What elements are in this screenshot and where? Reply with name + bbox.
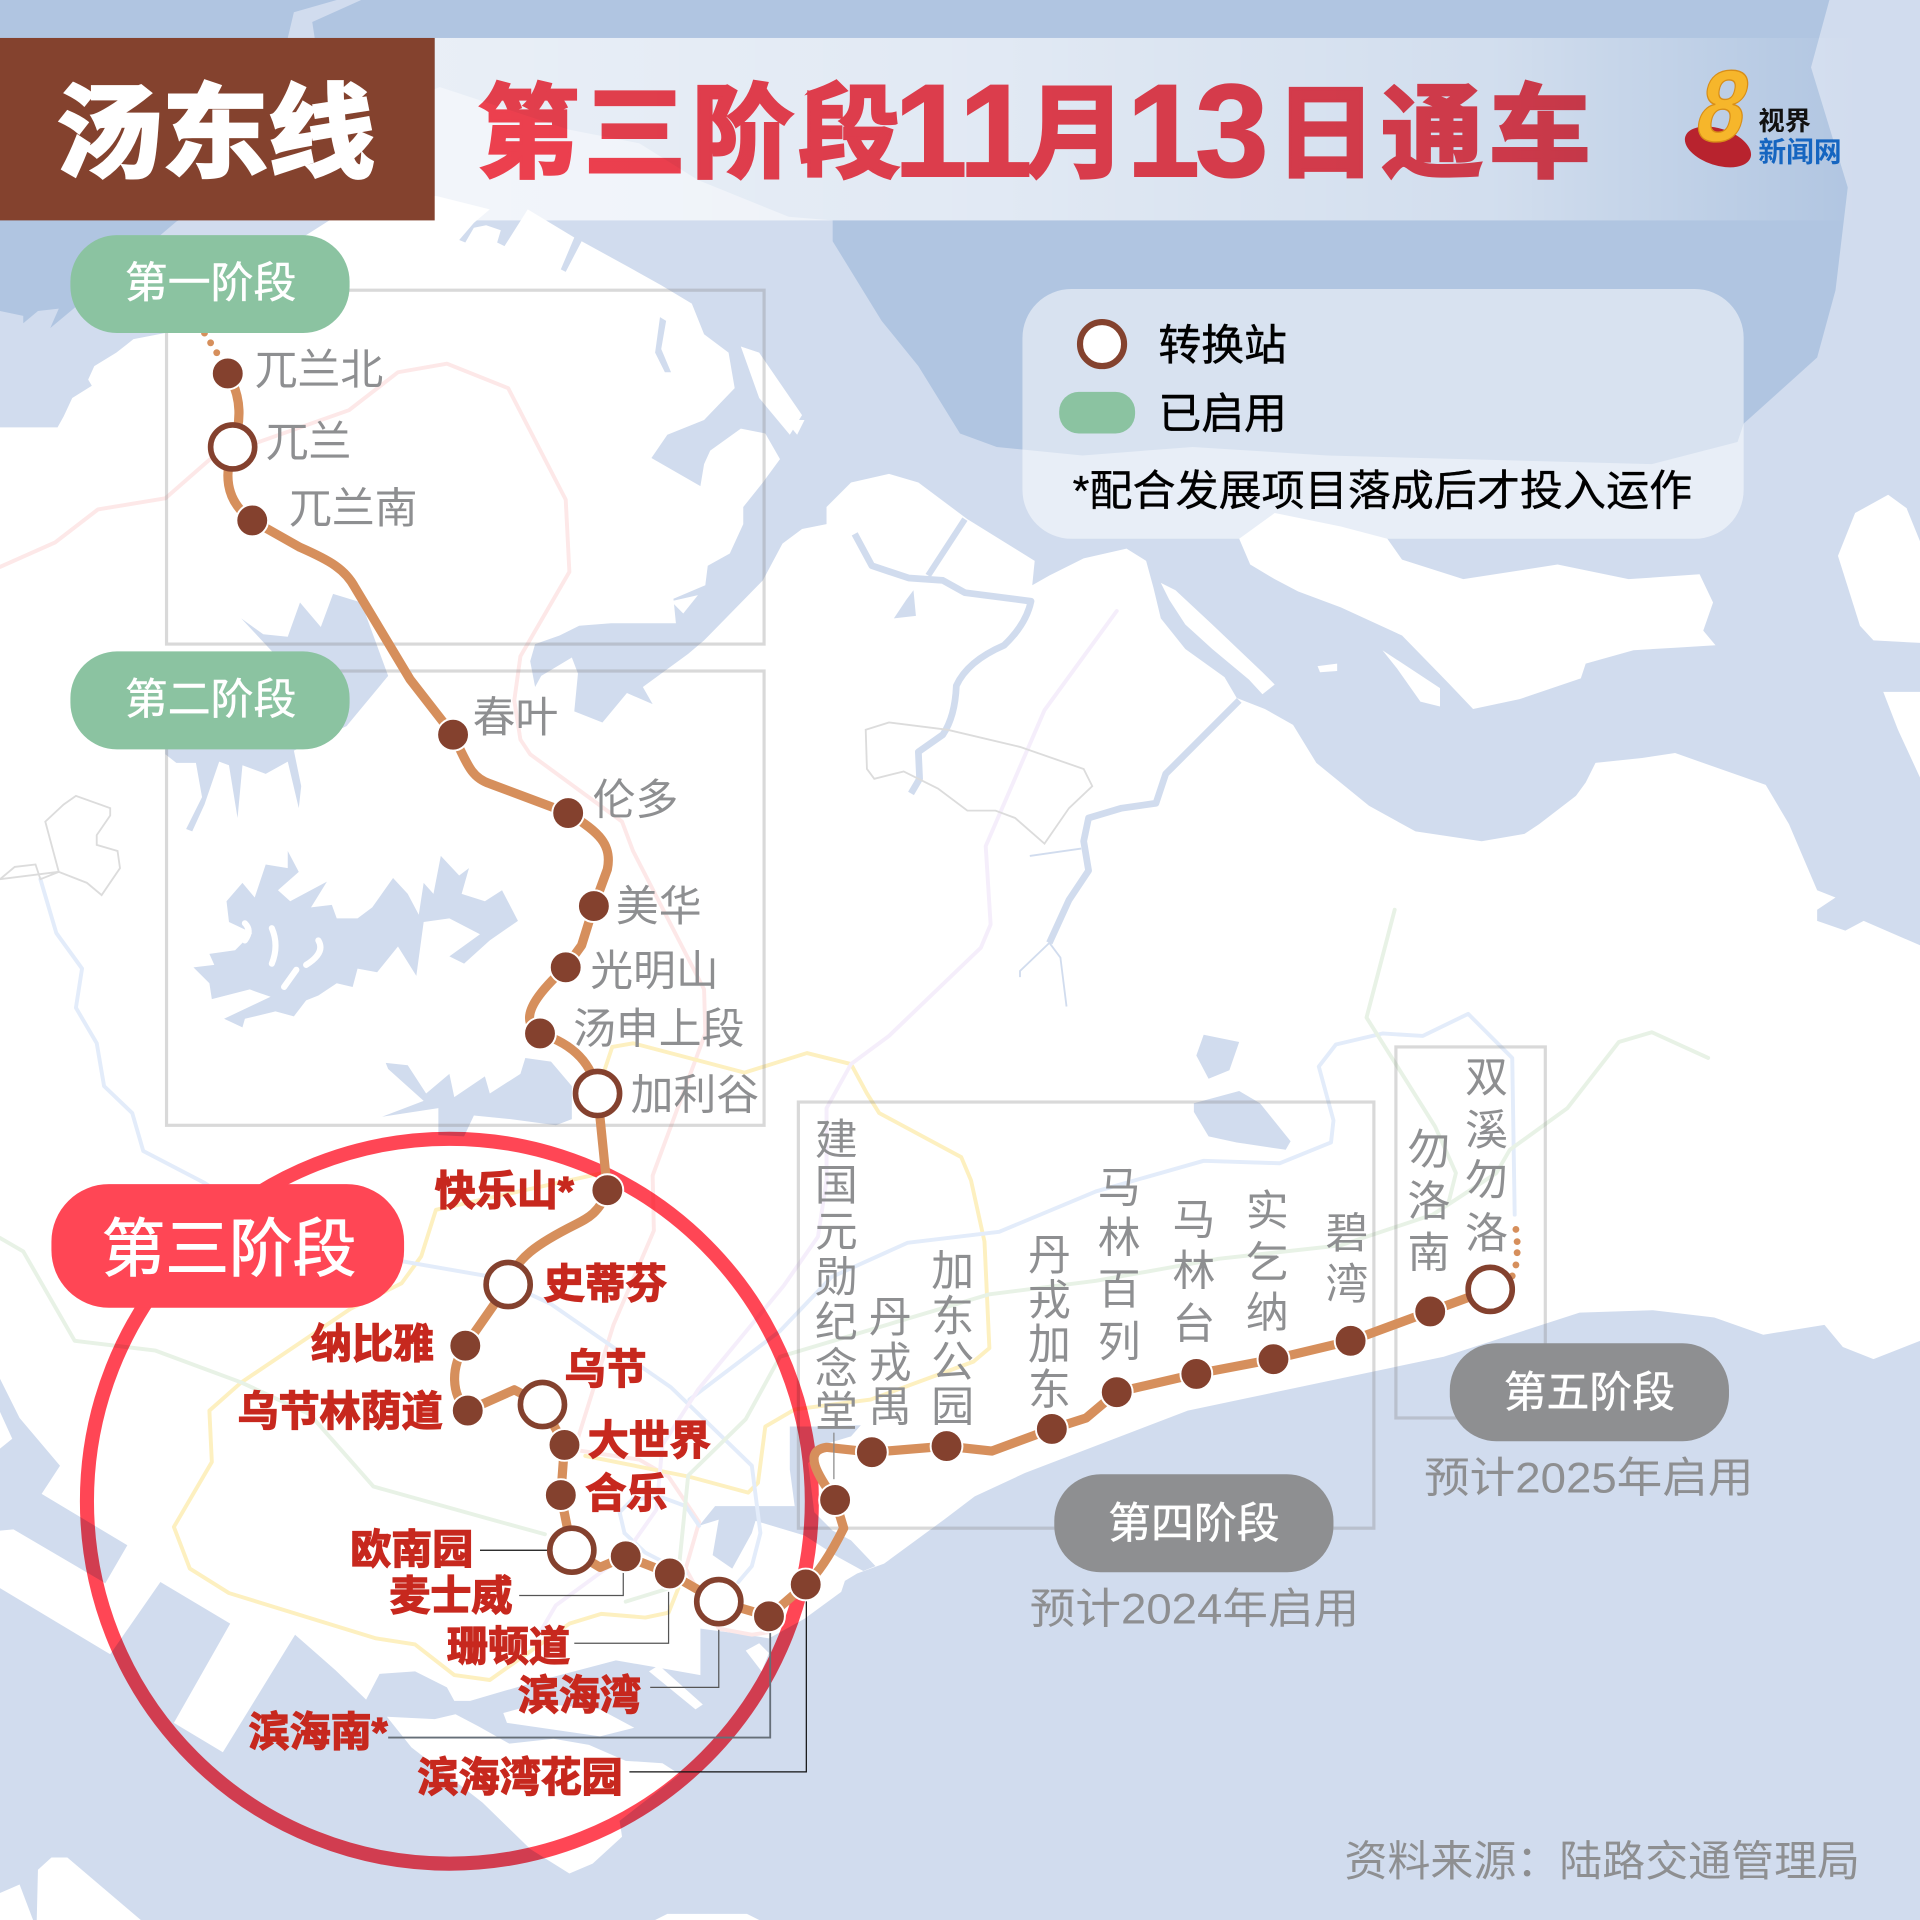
interchange stations	[211, 425, 1512, 1624]
phase three pill: 第三阶段	[102, 1214, 356, 1285]
title: phase three opening date: 11	[894, 57, 1032, 205]
station labels: phase three: 滨海湾花园	[418, 1754, 623, 1800]
phase two pill: 第二阶段	[125, 676, 296, 724]
phase three ring	[87, 1139, 812, 1864]
station labels: phases four and five (vertical): 加东公园	[931, 1248, 974, 1432]
legend: interchange ring	[1080, 322, 1124, 366]
station labels: phases four and five (vertical): 双溪勿洛	[1465, 1054, 1508, 1258]
phase two pill	[70, 651, 350, 749]
station labels: phase three: 珊顿道	[447, 1623, 570, 1669]
station labels: phases four and five (vertical): 马林百列	[1098, 1164, 1141, 1367]
logo: 8 视界新闻网: 视界	[1758, 106, 1811, 136]
header band	[435, 38, 1920, 220]
legend: opened swatch	[1059, 392, 1135, 433]
logo: 8 视界新闻网: 新闻网	[1758, 137, 1842, 168]
Thomson-East Coast Line route	[201, 330, 1521, 1616]
phase four pill and date	[1030, 1474, 1359, 1634]
station labels: phase three: 大世界	[588, 1418, 711, 1464]
station labels: phase three: 乌节林荫道	[238, 1388, 443, 1434]
leader lines for phase three labels	[388, 1433, 834, 1772]
phase boxes	[167, 290, 1545, 1528]
station labels: phases four and five (vertical): 勿洛南	[1408, 1126, 1450, 1277]
title: phase three opening date: 13	[1127, 57, 1269, 205]
station labels: phases one and two: 加利谷	[631, 1071, 759, 1119]
station labels: phases one and two: 汤申上段	[573, 1005, 744, 1053]
faint MRT network lines	[0, 364, 1708, 1680]
station labels: phases one and two	[255, 346, 759, 1119]
legend: interchange text: 转换站	[1158, 322, 1287, 370]
phase five pill and date: 预计2025年启用	[1424, 1455, 1753, 1503]
station labels: phase three: 滨海湾	[518, 1672, 641, 1718]
legend: footnote: *配合发展项目落成后才投入运作	[1073, 468, 1692, 516]
station labels: phases four and five (vertical): 碧湾	[1326, 1210, 1368, 1309]
title block: line name	[0, 38, 435, 220]
station labels: phase three: 史蒂芬	[544, 1261, 667, 1307]
station labels: phase three: 麦士威	[389, 1573, 512, 1619]
logo: 8 视界新闻网: 8	[1687, 50, 1759, 163]
title: phase three opening date: 月	[1025, 77, 1127, 191]
title: phase three opening date: 日	[1275, 77, 1376, 191]
station labels: phases four and five (vertical): 建国元勋纪念堂	[815, 1117, 858, 1437]
title: phase three opening date: 通车	[1381, 77, 1591, 191]
station labels: phases four and five (vertical): 丹戎禺	[869, 1294, 912, 1432]
phase five pill and date: 第五阶段	[1504, 1369, 1675, 1417]
station labels: phases one and two: 美华	[616, 883, 702, 931]
station labels: phase three	[238, 1168, 711, 1800]
title block: line name: 汤东线	[56, 77, 375, 191]
station labels: phases one and two: 伦多	[593, 776, 678, 824]
phase one pill	[70, 235, 350, 333]
station labels: phases one and two: 春叶	[473, 694, 558, 742]
title: phase three opening date: 第三阶段	[478, 77, 900, 191]
phase one pill: 第一阶段	[125, 260, 296, 308]
logo: 8 视界新闻网	[1680, 50, 1842, 175]
station labels: phase three: 纳比雅	[311, 1321, 434, 1367]
station dots	[212, 358, 1446, 1632]
phase five pill and date	[1424, 1343, 1753, 1503]
legend panel	[1022, 289, 1744, 539]
station labels: phases one and two: 光明山	[590, 948, 719, 996]
station labels: phases one and two: 兀兰	[266, 419, 351, 467]
legend: opened text: 已启用	[1158, 391, 1287, 439]
station labels: phases one and two: 兀兰南	[289, 485, 418, 533]
station labels: phase three: 滨海南*	[249, 1709, 388, 1755]
phase four pill and date: 第四阶段	[1108, 1500, 1280, 1548]
station labels: phases one and two: 兀兰北	[255, 346, 383, 394]
station labels: phase three: 欧南园	[350, 1527, 473, 1573]
station labels: phases four and five (vertical): 实乞纳	[1246, 1188, 1289, 1337]
station labels: phases four and five (vertical): 丹戎加东	[1028, 1232, 1071, 1414]
station labels: phases four and five (vertical): 马林台	[1172, 1196, 1215, 1348]
station labels: phases four and five (vertical)	[815, 1054, 1508, 1437]
station labels: phase three: 乌节	[564, 1347, 647, 1393]
phase three pill	[51, 1184, 404, 1308]
station labels: phase three: 合乐	[585, 1470, 667, 1516]
source note: 资料来源：陆路交通管理局	[1344, 1838, 1860, 1886]
station labels: phase three: 快乐山*	[435, 1168, 574, 1214]
phase four pill and date: 预计2024年启用	[1030, 1586, 1359, 1634]
